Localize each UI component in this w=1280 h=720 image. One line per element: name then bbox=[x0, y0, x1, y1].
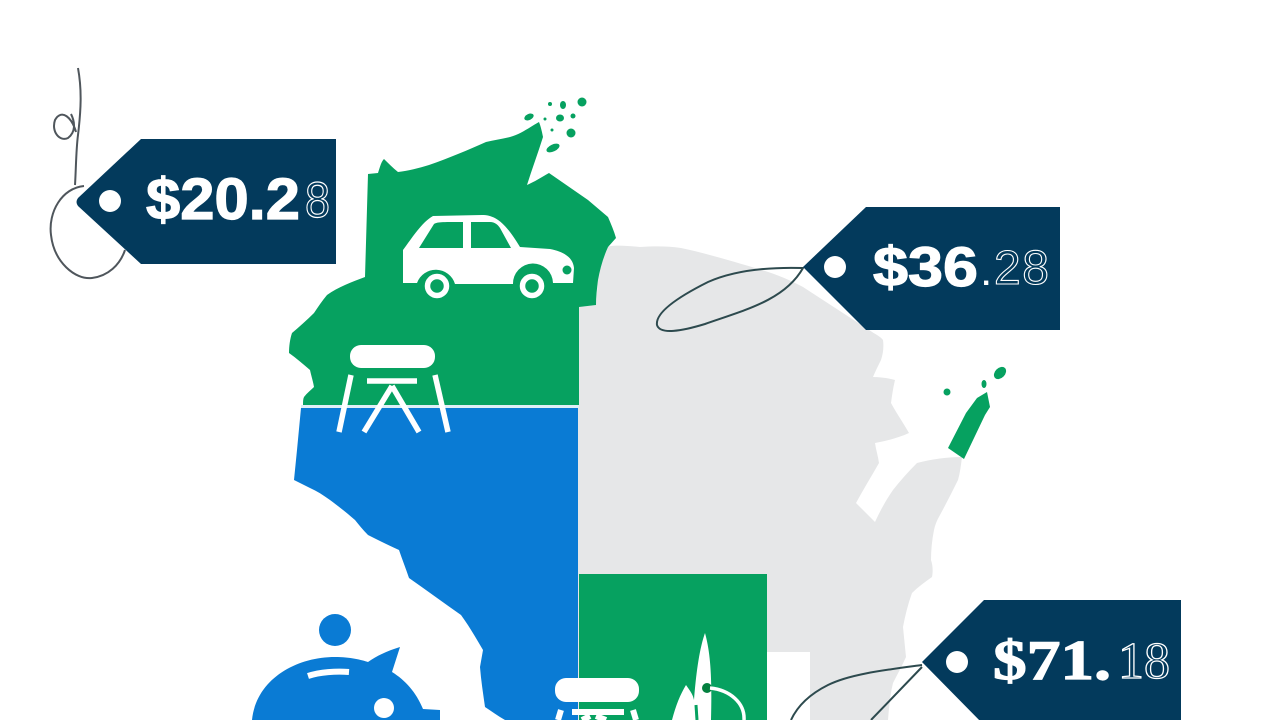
price cents: 18 bbox=[1118, 633, 1170, 690]
string: tag three bbox=[791, 665, 922, 720]
divider: white line between green and blue bbox=[301, 405, 579, 408]
tag body bbox=[76, 139, 336, 264]
tag hole bbox=[824, 256, 846, 278]
tag hole bbox=[946, 651, 968, 673]
string: tag two bbox=[657, 268, 803, 331]
specks: green island fragment on the east side bbox=[944, 365, 1008, 459]
tag body bbox=[803, 207, 1060, 330]
icon: piggy bank with coin bbox=[252, 614, 440, 720]
specks: green fragments at the northern tip bbox=[523, 98, 586, 154]
icon: car bbox=[403, 215, 574, 300]
region: grey map area bbox=[578, 246, 962, 720]
region: white square cutout bbox=[767, 652, 810, 720]
price text: $71. bbox=[993, 630, 1111, 692]
tag body bbox=[922, 600, 1181, 720]
region: green lower square bbox=[579, 574, 767, 720]
price tag: $20.28 bbox=[51, 68, 336, 278]
icon: lower stool bbox=[555, 678, 639, 720]
icon: scissors-like spike shape bbox=[672, 633, 744, 720]
price tag: $71.18 bbox=[791, 600, 1181, 720]
price last digit: 8 bbox=[305, 172, 330, 228]
price text: $20.2 bbox=[146, 167, 300, 232]
region: green upper map area bbox=[289, 122, 616, 405]
price tag: $36.28 bbox=[657, 207, 1060, 331]
string: tag one bbox=[51, 68, 125, 278]
price separator: . bbox=[982, 259, 990, 292]
price cents: 28 bbox=[994, 242, 1049, 295]
region: blue map area bbox=[294, 408, 578, 720]
icon: stool in the green and blue regions bbox=[339, 345, 448, 432]
tag hole bbox=[99, 190, 121, 212]
price text: $36 bbox=[873, 235, 978, 298]
